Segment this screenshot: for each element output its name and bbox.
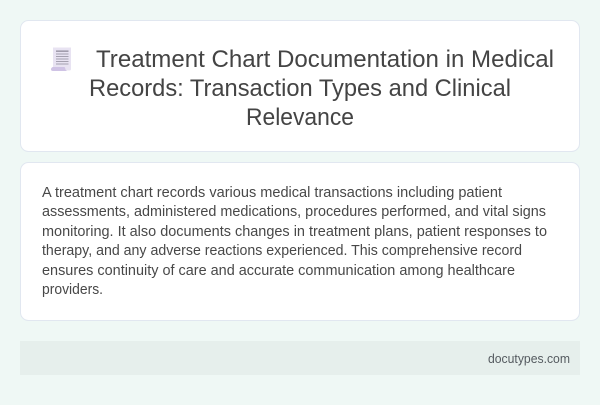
text block: description: A treatment chart records various medical transactions including patient [42,185,502,201]
heading: Relevance [246,104,354,131]
panel: title card [20,20,580,152]
heading: Records: Transaction Types and Clinical [89,75,511,102]
text block: description: providers. [42,282,103,298]
icon: document receipt [51,48,71,71]
text block: description: therapy, and any adverse reactions experienced. This comprehensive record [42,243,522,259]
text block: description [42,185,547,298]
footer source text: docutypes.com [488,351,570,366]
footer bar [20,341,580,375]
text block: description: monitoring. It also documents changes in treatment plans, patient responses to [42,224,547,240]
heading: Treatment Chart Documentation in Medical [96,46,554,73]
text block: description: ensures continuity of care and accurate communication among healthcare [42,263,515,279]
panel: description card [20,162,580,320]
text block: description: assessments, administered medications, procedures performed, and vital signs [42,204,546,220]
heading [89,46,554,131]
